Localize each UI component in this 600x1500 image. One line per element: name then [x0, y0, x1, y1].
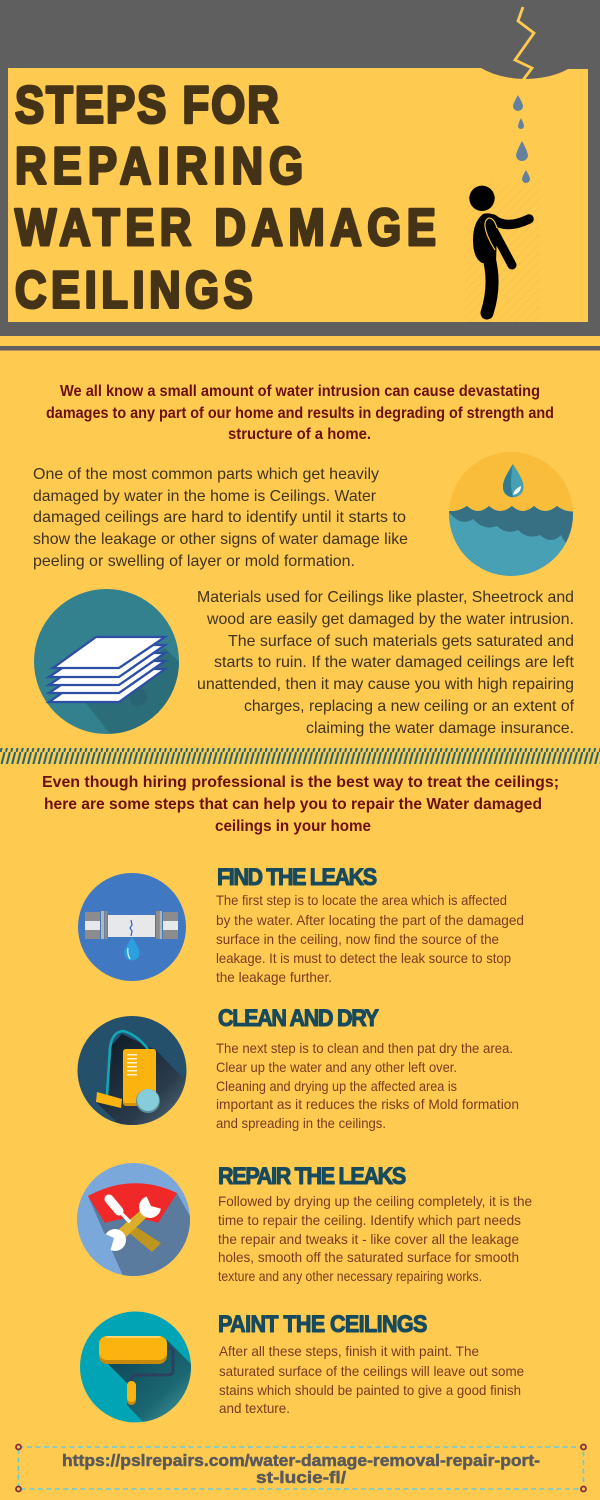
step 2: clean and dry: [78, 1004, 519, 1131]
paragraph: ceiling materials: wood are easily get damaged by the water intrusion.: [206, 611, 574, 628]
paragraph: ceiling materials: unattended, then it may cause you with high repairing: [197, 676, 574, 693]
intro statement: We all know a small amount of water intrusion can cause devastating: [60, 383, 540, 400]
title: REPAIRING: [15, 138, 303, 195]
text: paint the ceilings: [219, 1344, 524, 1416]
text: paint the ceilings: saturated surface of the ceilings will leave out some: [219, 1364, 524, 1379]
icon: water drop over waves: [445, 452, 576, 580]
paragraph: ceiling materials: [197, 589, 575, 737]
text: find the leaks: surface in the ceiling, now find the source of the: [216, 932, 499, 947]
text: paint the ceilings: After all these steps, finish it with paint. The: [219, 1344, 479, 1359]
title panel with broken ceiling: [8, 68, 588, 322]
steps introduction: ceilings in your home: [215, 818, 371, 835]
intro statement: damages to any part of our home and results in degrading of strength and: [46, 405, 554, 422]
text: find the leaks: the leakage further.: [216, 970, 332, 985]
title: [15, 77, 436, 319]
text: repair the leaks: Followed by drying up the ceiling completely, it is the: [218, 1194, 532, 1209]
paragraph: ceiling materials: Materials used for Ceilings like plaster, Sheetrock and: [197, 589, 574, 606]
link text: https://pslrepairs.com/water-damage-removal-repair-port-: [62, 1451, 540, 1470]
paragraph: ceilings commonly damaged: peeling or swelling of layer or mold formation.: [33, 553, 355, 570]
paragraph: ceilings commonly damaged: show the leakage or other signs of water damage like: [33, 531, 408, 548]
text: clean and dry: important as it reduces the risks of Mold formation: [216, 1097, 519, 1112]
paragraph: ceilings commonly damaged: damaged ceilings are hard to identify until it starts to: [33, 509, 406, 526]
step 4: paint the ceilings: [80, 1310, 524, 1425]
icon: lightning crack: [515, 7, 534, 80]
text: find the leaks: by the water. After locating the part of the damaged: [216, 913, 524, 928]
step 3: repair the leaks: [77, 1162, 532, 1284]
text: repair the leaks: the repair and tweaks it - like cover all the leakage: [218, 1232, 519, 1247]
heading: find the leaks: FIND THE LEAKS: [217, 863, 377, 890]
steps introduction: here are some steps that can help you to repair the Water damaged: [44, 796, 542, 813]
title: WATER DAMAGE: [15, 200, 436, 257]
text: find the leaks: The first step is to locate the area which is affected: [216, 893, 507, 908]
icon: stack of ceiling sheets: [34, 589, 180, 740]
paragraph: ceiling materials: The surface of such materials gets saturated and: [228, 633, 574, 650]
text: repair the leaks: time to repair the ceiling. Identify which part needs: [218, 1213, 521, 1228]
steps introduction: Even though hiring professional is the best way to treat the ceilings;: [42, 774, 559, 791]
icon: leaking pipe: [78, 873, 186, 981]
steps introduction: [42, 774, 559, 835]
icon: vacuum cleaner: [78, 1016, 190, 1130]
text: find the leaks: [216, 893, 524, 985]
source link box: [16, 1444, 586, 1492]
heading: paint the ceilings: PAINT THE CEILINGS: [218, 1310, 427, 1337]
title: STEPS FOR: [15, 77, 279, 134]
heading: repair the leaks: REPAIR THE LEAKS: [218, 1162, 406, 1189]
text: find the leaks: leakage. It is must to detect the leak source to stop: [216, 951, 511, 966]
text: repair the leaks: holes, smooth off the saturated surface for smooth: [218, 1250, 519, 1265]
icon: person looking up: [465, 182, 540, 322]
text: clean and dry: The next step is to clean and then pat dry the area.: [216, 1041, 513, 1056]
intro statement: structure of a home.: [228, 426, 371, 443]
text: paint the ceilings: and texture.: [219, 1401, 290, 1416]
icon: crossed tools: [77, 1163, 195, 1276]
title: CEILINGS: [15, 262, 253, 319]
text: repair the leaks: [218, 1194, 532, 1284]
text: clean and dry: [216, 1041, 519, 1131]
text: paint the ceilings: stains which should be painted to give a good finish: [219, 1383, 521, 1398]
intro statement: [46, 383, 554, 443]
text: clean and dry: Clear up the water and any other left over.: [216, 1060, 457, 1075]
icon: falling water drops: [513, 95, 530, 183]
step 1: find the leaks: [78, 863, 524, 985]
paragraph: ceilings commonly damaged: [33, 466, 408, 570]
heading: clean and dry: CLEAN AND DRY: [218, 1004, 380, 1031]
link text: st-lucie-fl/: [256, 1468, 346, 1487]
paragraph: ceiling materials: charges, replacing a new ceiling or an extent of: [244, 698, 575, 715]
paragraph: ceiling materials: starts to ruin. If the water damaged ceilings are left: [214, 654, 575, 671]
link text: [62, 1451, 540, 1487]
icon: paint roller: [80, 1312, 195, 1425]
text: clean and dry: and spreading in the ceilings.: [216, 1116, 386, 1131]
text: clean and dry: Cleaning and drying up the affected area is: [216, 1079, 457, 1094]
text: repair the leaks: texture and any other necessary repairing works.: [218, 1269, 482, 1284]
header band: [0, 0, 600, 350]
paragraph: ceilings commonly damaged: damaged by water in the home is Ceilings. Water: [33, 488, 377, 505]
paragraph: ceiling materials: claiming the water damage insurance.: [306, 720, 574, 737]
paragraph: ceilings commonly damaged: One of the most common parts which get heavily: [33, 466, 379, 483]
